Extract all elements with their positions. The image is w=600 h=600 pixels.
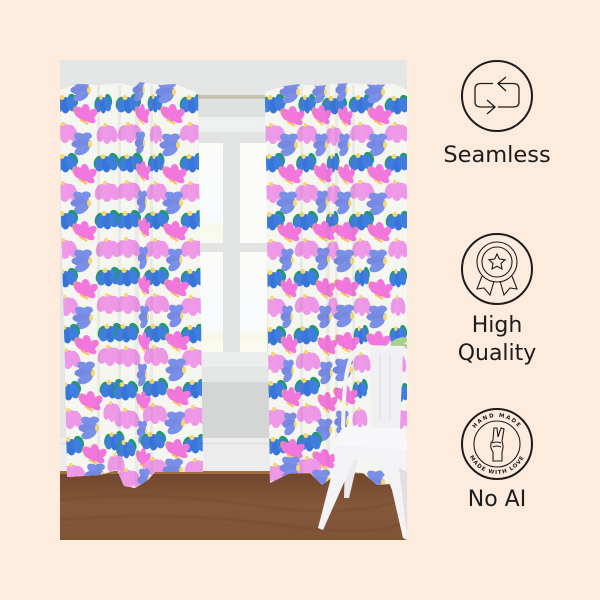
label: Seamless: Seamless bbox=[443, 142, 551, 168]
left curtain bbox=[60, 82, 203, 488]
right curtain flowers bbox=[265, 83, 407, 485]
wood floor bbox=[60, 471, 407, 540]
left curtain folds bbox=[97, 85, 153, 485]
label: No AI: No AI bbox=[468, 487, 526, 512]
lower wall and baseboard bbox=[60, 382, 270, 444]
right curtain folds bbox=[300, 85, 355, 485]
label: High Quality: Quality bbox=[458, 341, 536, 366]
chair seat bbox=[333, 427, 407, 450]
label: High Quality: High bbox=[472, 313, 522, 338]
feature: no AI bbox=[461, 408, 533, 512]
wall bbox=[60, 60, 407, 475]
label: High Quality bbox=[458, 313, 536, 366]
chair front legs and apron bbox=[318, 445, 407, 540]
photo: curtains in room bbox=[51, 60, 414, 540]
white chair bbox=[318, 347, 407, 540]
feature: high quality bbox=[458, 234, 536, 366]
left curtain flowers bbox=[60, 82, 203, 488]
window frame bbox=[198, 117, 267, 352]
icon: peace hand bbox=[491, 428, 504, 461]
icon: hand made badge: HAND MADE bbox=[472, 413, 521, 428]
curtain rod bbox=[198, 95, 265, 99]
back leg bbox=[344, 460, 358, 498]
icon: award medal bbox=[462, 234, 532, 304]
icon: seamless loop bbox=[462, 61, 532, 131]
feature: seamless bbox=[443, 61, 551, 168]
icon: hand made badge: MADE WITH LOVE bbox=[470, 455, 524, 474]
chair back bbox=[343, 347, 407, 428]
right curtain bbox=[265, 83, 407, 485]
plant bbox=[390, 337, 407, 349]
icon: hand made badge bbox=[461, 408, 533, 480]
